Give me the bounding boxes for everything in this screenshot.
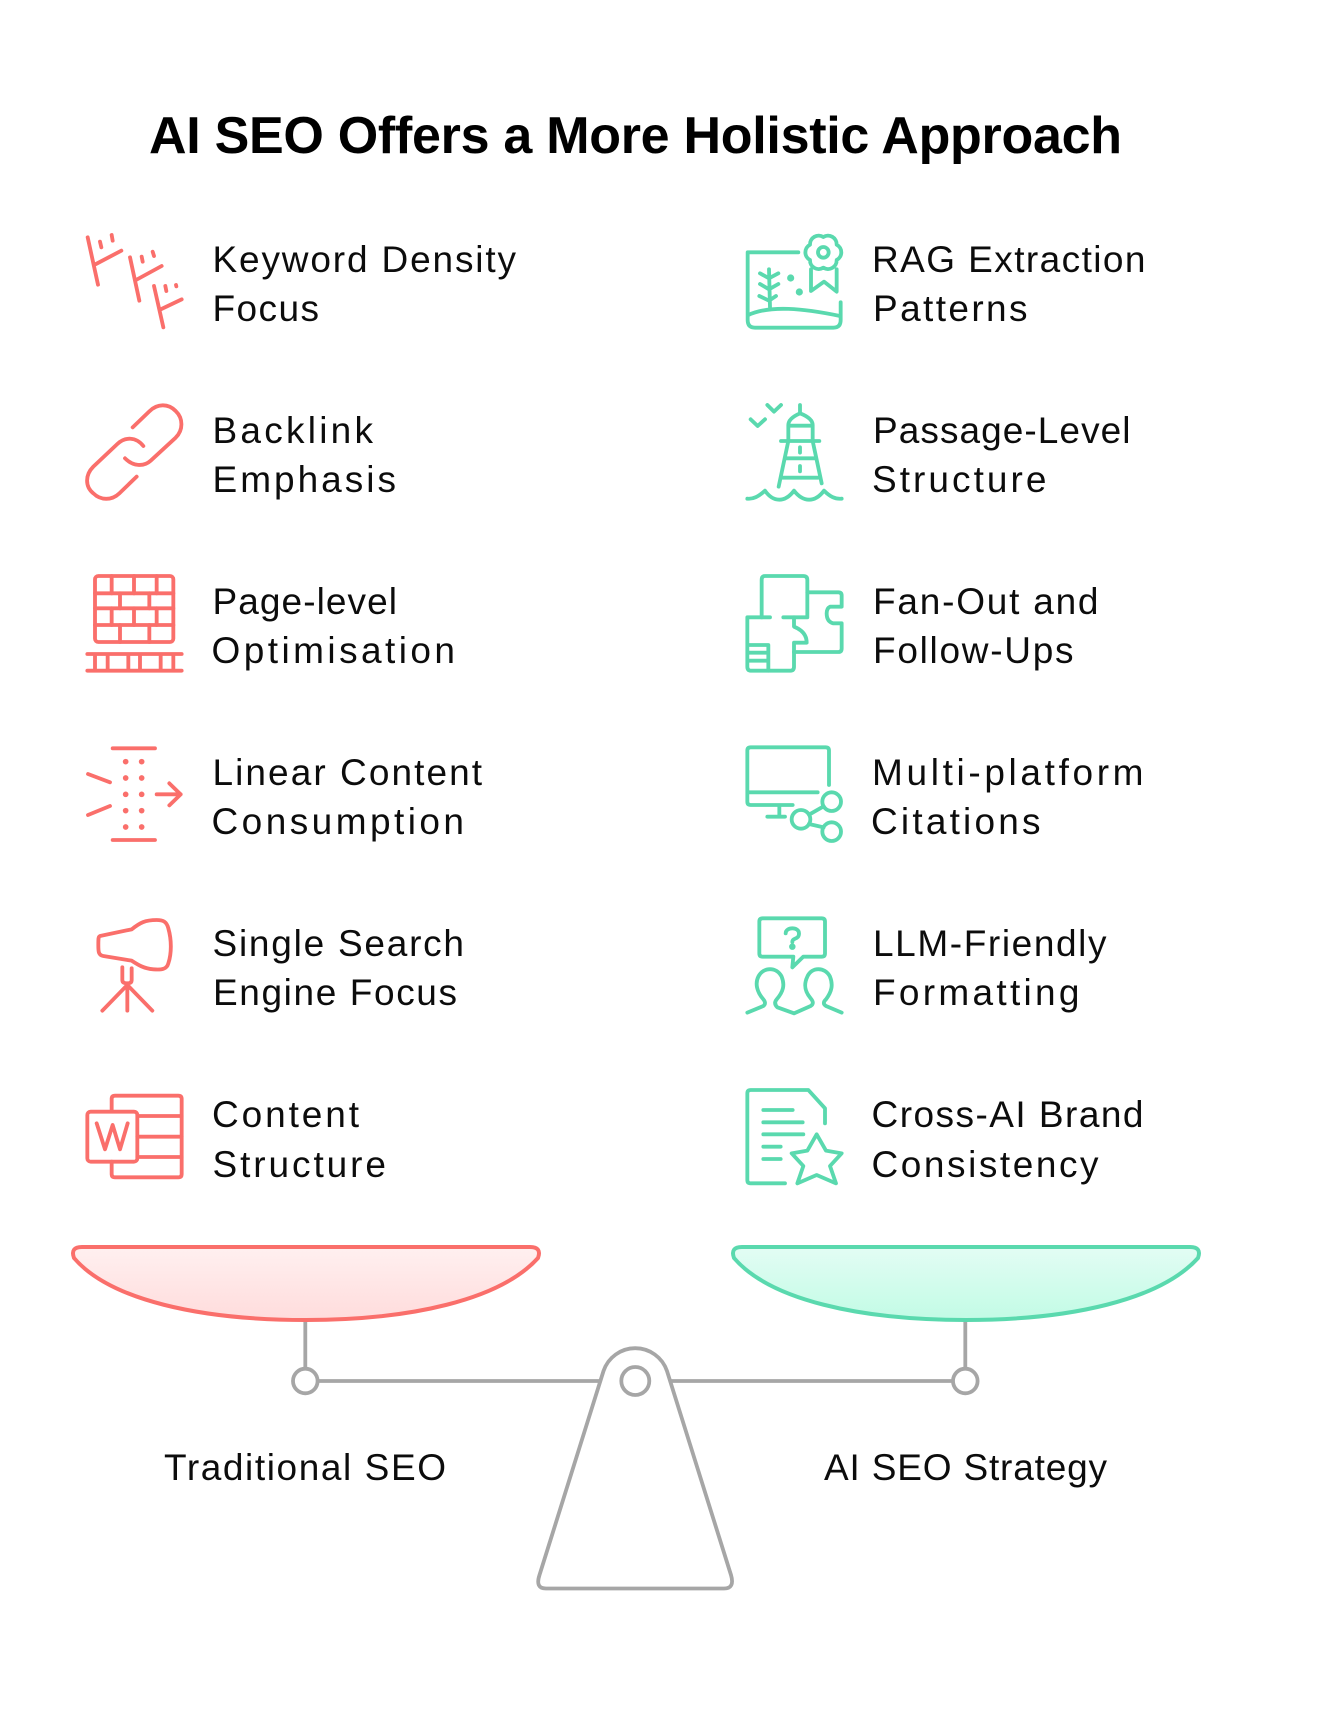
text: Passage-Level Structure: Passage-Level xyxy=(873,410,1130,451)
text: Keyword Density Focus: Focus xyxy=(212,288,319,329)
text: Multi-platform Citations: Citations xyxy=(871,801,1040,842)
right hinge xyxy=(953,1369,978,1393)
label: Traditional SEO: Traditional SEO xyxy=(164,1447,446,1488)
text: Multi-platform Citations: Multi-platform xyxy=(872,752,1144,793)
text: Keyword Density Focus xyxy=(212,239,516,329)
text: Cross-AI Brand Consistency: Cross-AI Brand xyxy=(872,1094,1144,1135)
left pan xyxy=(73,1247,539,1320)
icon: telescope on tripod xyxy=(98,920,171,1011)
text: Passage-Level Structure: Structure xyxy=(872,459,1046,500)
icon: monitor with share nodes xyxy=(747,747,841,841)
text: RAG Extraction Patterns: RAG Extraction xyxy=(872,239,1146,280)
icon: brick wall xyxy=(87,576,182,671)
icon: keyword density marks xyxy=(88,235,182,327)
text: Multi-platform Citations xyxy=(871,752,1144,842)
text: Keyword Density Focus: Keyword Density xyxy=(212,239,516,280)
text: Fan-Out and Follow-Ups: Follow-Ups xyxy=(873,630,1074,671)
text: LLM-Friendly Formatting: LLM-Friendly xyxy=(873,923,1107,964)
text: Page-level Optimisation: Optimisation xyxy=(212,630,455,671)
text: Cross-AI Brand Consistency: Consistency xyxy=(872,1144,1099,1185)
text: Single Search Engine Focus: Single Search xyxy=(212,923,464,964)
text: Single Search Engine Focus: Engine Focus xyxy=(213,972,457,1013)
text: Linear Content Consumption: Linear Content xyxy=(212,752,483,793)
text: Backlink Emphasis xyxy=(212,410,396,500)
text: RAG Extraction Patterns: Patterns xyxy=(873,288,1028,329)
text: Backlink Emphasis: Emphasis xyxy=(212,459,396,500)
text: Cross-AI Brand Consistency xyxy=(872,1094,1144,1185)
icon: document with star xyxy=(747,1090,842,1183)
text: LLM-Friendly Formatting xyxy=(873,923,1107,1013)
fulcrum pivot xyxy=(621,1367,649,1395)
balance scale xyxy=(73,1247,1199,1588)
text: Fan-Out and Follow-Ups xyxy=(873,581,1098,671)
text: Content Structure: Structure xyxy=(212,1144,386,1185)
text: Page-level Optimisation: Page-level xyxy=(212,581,397,622)
text: Linear Content Consumption: Consumption xyxy=(212,801,464,842)
text: LLM-Friendly Formatting: Formatting xyxy=(873,972,1080,1013)
left hinge xyxy=(293,1369,318,1393)
panel: AI SEO items xyxy=(747,236,1146,1185)
panel: traditional SEO items xyxy=(87,235,516,1185)
icon: word document xyxy=(87,1096,182,1177)
fulcrum base xyxy=(538,1348,732,1588)
text: RAG Extraction Patterns xyxy=(872,239,1146,329)
beam and stems xyxy=(305,1320,965,1381)
icon: two people with question bubble xyxy=(747,918,842,1013)
title: AI SEO Offers a More Holistic Approach xyxy=(149,107,1122,165)
text: Single Search Engine Focus xyxy=(212,923,464,1013)
label: AI SEO Strategy: AI SEO Strategy xyxy=(824,1447,1108,1488)
text: Linear Content Consumption xyxy=(212,752,483,842)
text: Passage-Level Structure xyxy=(872,410,1130,500)
icon: linear flow xyxy=(88,748,181,840)
text: Fan-Out and Follow-Ups: Fan-Out and xyxy=(873,581,1098,622)
text: Content Structure xyxy=(212,1094,386,1185)
text: Content Structure: Content xyxy=(212,1094,360,1135)
icon: chain link xyxy=(87,405,181,499)
text: Page-level Optimisation xyxy=(212,581,455,671)
right pan xyxy=(733,1247,1199,1320)
text: Backlink Emphasis: Backlink xyxy=(212,410,374,451)
icon: map with award rosette xyxy=(748,236,841,328)
icon: lighthouse xyxy=(747,405,842,500)
icon: puzzle pieces xyxy=(747,576,842,671)
